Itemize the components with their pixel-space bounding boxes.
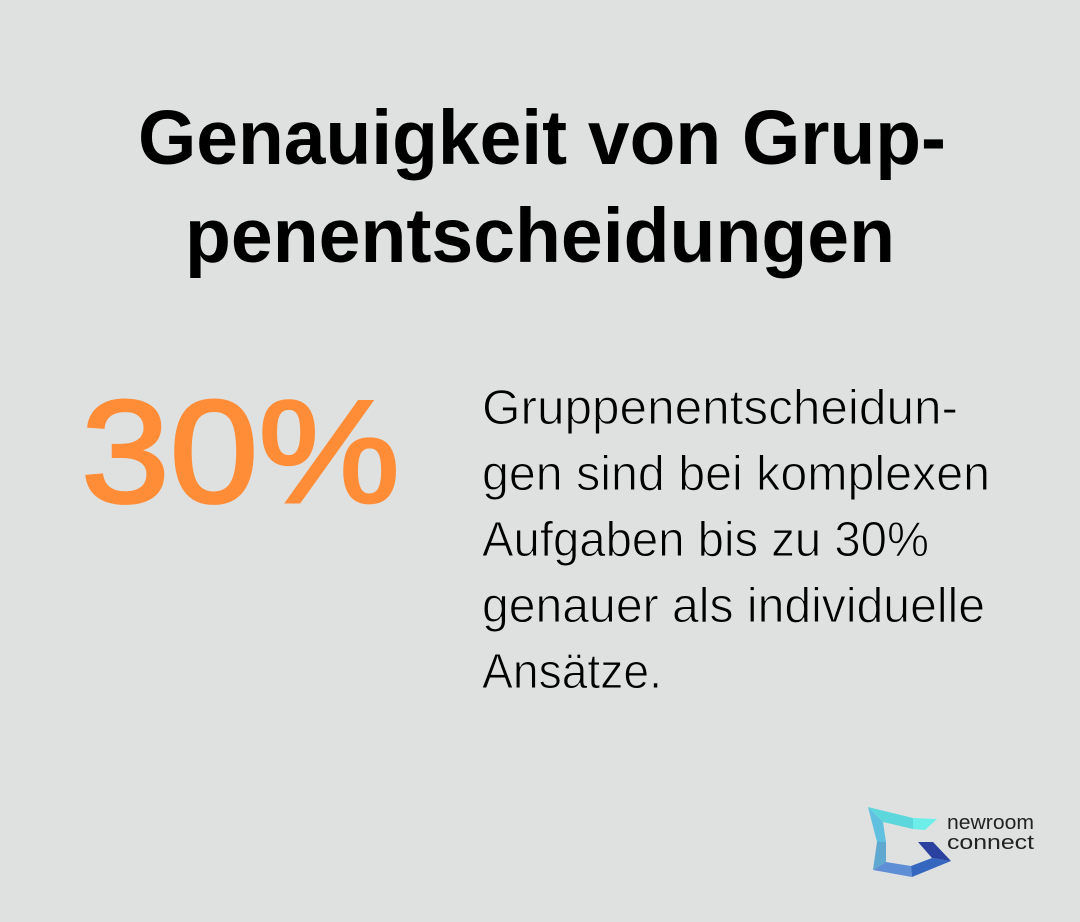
description text bbox=[482, 381, 990, 699]
description text: Aufgaben bis zu 30% bbox=[482, 513, 929, 567]
title: Genauigkeit von Grup- bbox=[138, 95, 946, 181]
icon: logo mark bbox=[868, 807, 951, 877]
title bbox=[138, 95, 946, 279]
logo wordmark: newroom bbox=[947, 812, 1034, 834]
description text: Ansätze. bbox=[482, 645, 662, 699]
big stat: 30%: 30% bbox=[81, 370, 400, 533]
logo: newroom connect bbox=[868, 807, 1035, 877]
description text: gen sind bei komplexen bbox=[482, 447, 990, 501]
description text: genauer als individuelle bbox=[482, 579, 985, 633]
logo wordmark: connect bbox=[947, 832, 1035, 854]
title: penentscheidungen bbox=[185, 193, 895, 279]
logo wordmark bbox=[947, 812, 1035, 854]
description text: Gruppenentscheidun- bbox=[482, 381, 958, 435]
